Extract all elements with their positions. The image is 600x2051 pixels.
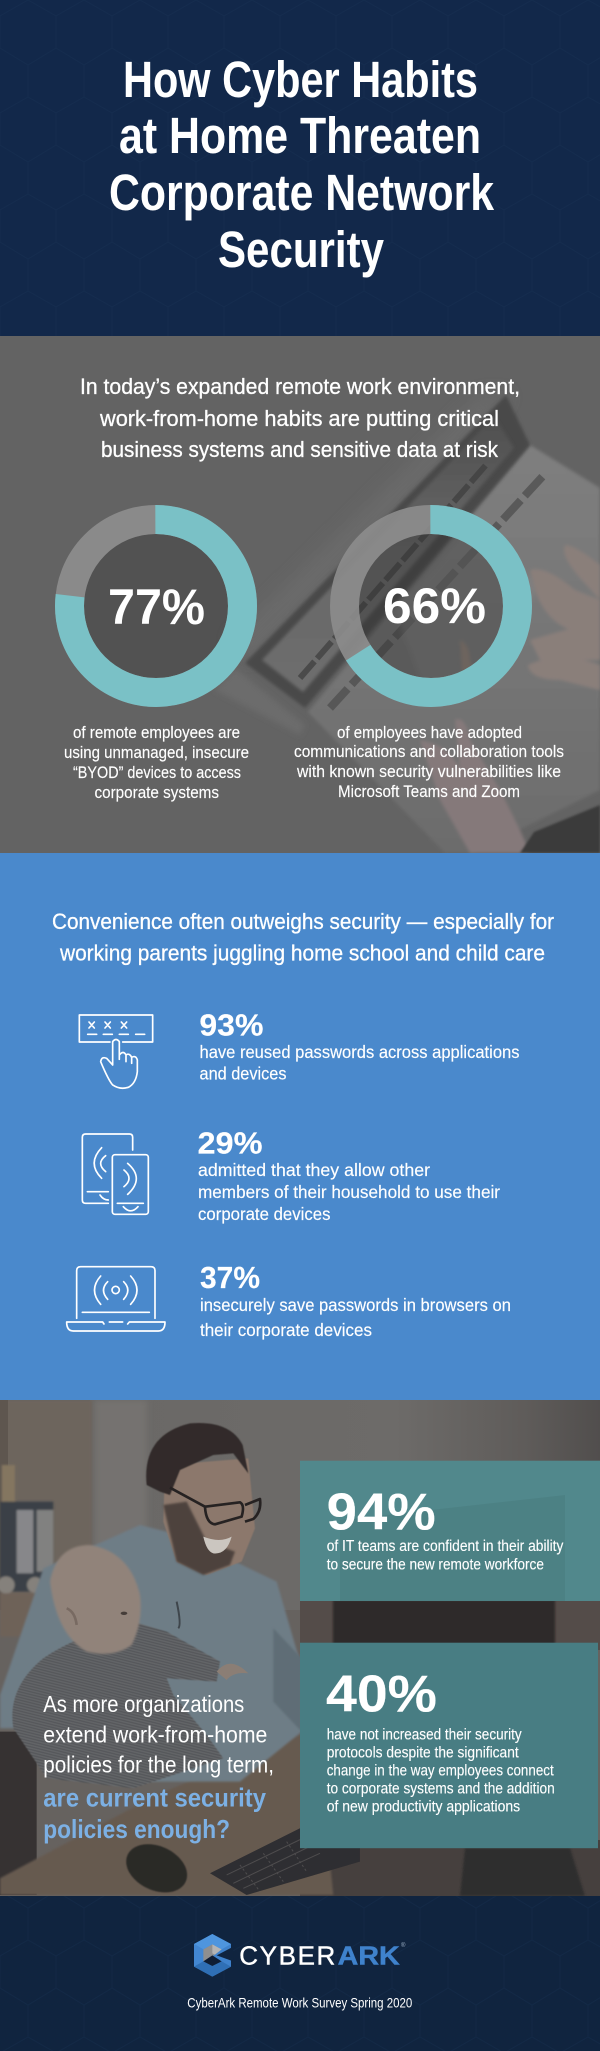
title: at Home Threaten xyxy=(119,107,481,164)
stat: 40%: to corporate systems and the addition xyxy=(327,1781,555,1798)
panel: 40% stat xyxy=(300,1643,598,1848)
panel: header xyxy=(0,0,600,336)
heading: working parents juggling home school and child care xyxy=(59,940,545,966)
stat: 40% xyxy=(326,1666,555,1816)
panel: footer xyxy=(0,1896,600,2051)
caption: 66%: with known security vulnerabilities like xyxy=(296,763,561,781)
subheading: work-from-home habits are putting critical xyxy=(99,406,499,431)
stat: 94%: to secure the new remote workforce xyxy=(327,1556,544,1573)
text: closing question: are current security xyxy=(43,1783,266,1813)
text: closing question: extend work-from-home xyxy=(43,1722,267,1748)
text: closing question: As more organizations xyxy=(43,1691,244,1717)
caption: 77%: using unmanaged, insecure xyxy=(64,744,249,762)
icon: CyberArk hexagon xyxy=(194,1934,233,1977)
stat: 37%: their corporate devices xyxy=(200,1320,372,1340)
stat: 37%: 37% xyxy=(200,1260,260,1295)
chart: 77% donut: 77% xyxy=(108,579,205,635)
chart: 66% donut xyxy=(344,520,518,692)
stat: 93%: have reused passwords across applications xyxy=(200,1042,520,1062)
photo: father and baby at computer xyxy=(0,1400,600,1902)
panel: convenience vs security xyxy=(0,853,600,1400)
icon: password and pointing hand xyxy=(79,1015,153,1088)
stat: 40%: change in the way employees connect xyxy=(327,1763,554,1780)
source note: CyberArk Remote Work Survey Spring 2020 xyxy=(187,1994,412,2010)
subheading: business systems and sensitive data at risk xyxy=(101,437,499,462)
stat: 29%: members of their household to use their xyxy=(198,1182,500,1202)
title: Security xyxy=(218,221,385,278)
caption: 66% xyxy=(294,724,564,801)
panel: 94% stat xyxy=(300,1461,600,1601)
stat: 40%: protocols despite the significant xyxy=(327,1744,519,1761)
caption: 77%: corporate systems xyxy=(94,784,219,802)
caption: 66%: Microsoft Teams and Zoom xyxy=(338,783,520,801)
logo: CyberArk: ® xyxy=(401,1942,406,1949)
stat: 29%: 29% xyxy=(198,1126,262,1161)
heading xyxy=(52,909,554,966)
title: How Cyber Habits xyxy=(123,51,478,108)
text: closing question xyxy=(43,1691,274,1844)
stat: 29%: admitted that they allow other xyxy=(198,1160,430,1180)
caption: 77% xyxy=(64,724,249,802)
icon: laptop with signal xyxy=(67,1267,165,1331)
logo: CyberArk xyxy=(194,1934,406,1977)
chart: 77% donut xyxy=(70,520,242,692)
panel: security policies xyxy=(0,1400,600,1902)
stat: 40%: 40% xyxy=(326,1666,437,1724)
subheading: In today’s expanded remote work environment, xyxy=(80,374,520,399)
stat: 94% xyxy=(327,1483,564,1573)
stat: 93%: and devices xyxy=(200,1064,287,1084)
stat: 40%: have not increased their security xyxy=(327,1726,522,1743)
chart: 66% donut: 66% xyxy=(383,578,486,634)
stat: 94%: 94% xyxy=(327,1483,436,1541)
caption: 66%: communications and collaboration tools xyxy=(294,743,564,761)
logo: CyberArk: CYBER xyxy=(239,1940,335,1970)
logo: CyberArk: ARK xyxy=(338,1940,400,1970)
photo: laptops and hands xyxy=(0,336,600,853)
text: closing question: policies for the long term, xyxy=(43,1752,274,1778)
stat: 29% xyxy=(198,1126,500,1224)
stat: 37%: insecurely save passwords in browsers on xyxy=(200,1295,511,1315)
stat: 94%: of IT teams are confident in their ability xyxy=(327,1538,564,1555)
text: closing question: policies enough? xyxy=(43,1814,230,1844)
caption: 77%: of remote employees are xyxy=(73,724,240,742)
title: Corporate Network xyxy=(109,164,495,221)
stat: 93% xyxy=(199,1008,520,1084)
stat: 29%: corporate devices xyxy=(198,1204,331,1224)
heading: Convenience often outweighs security — especially for xyxy=(52,909,554,934)
icon: tablet and phone xyxy=(82,1134,148,1214)
caption: 66%: of employees have adopted xyxy=(337,724,522,742)
stat: 40%: of new productivity applications xyxy=(327,1799,520,1816)
stat: 37% xyxy=(200,1260,511,1340)
panel: remote work risk xyxy=(0,336,600,853)
stat: 93%: 93% xyxy=(199,1008,263,1043)
caption: 77%: “BYOD” devices to access xyxy=(73,764,241,782)
subheading xyxy=(80,374,520,462)
title xyxy=(109,51,495,278)
